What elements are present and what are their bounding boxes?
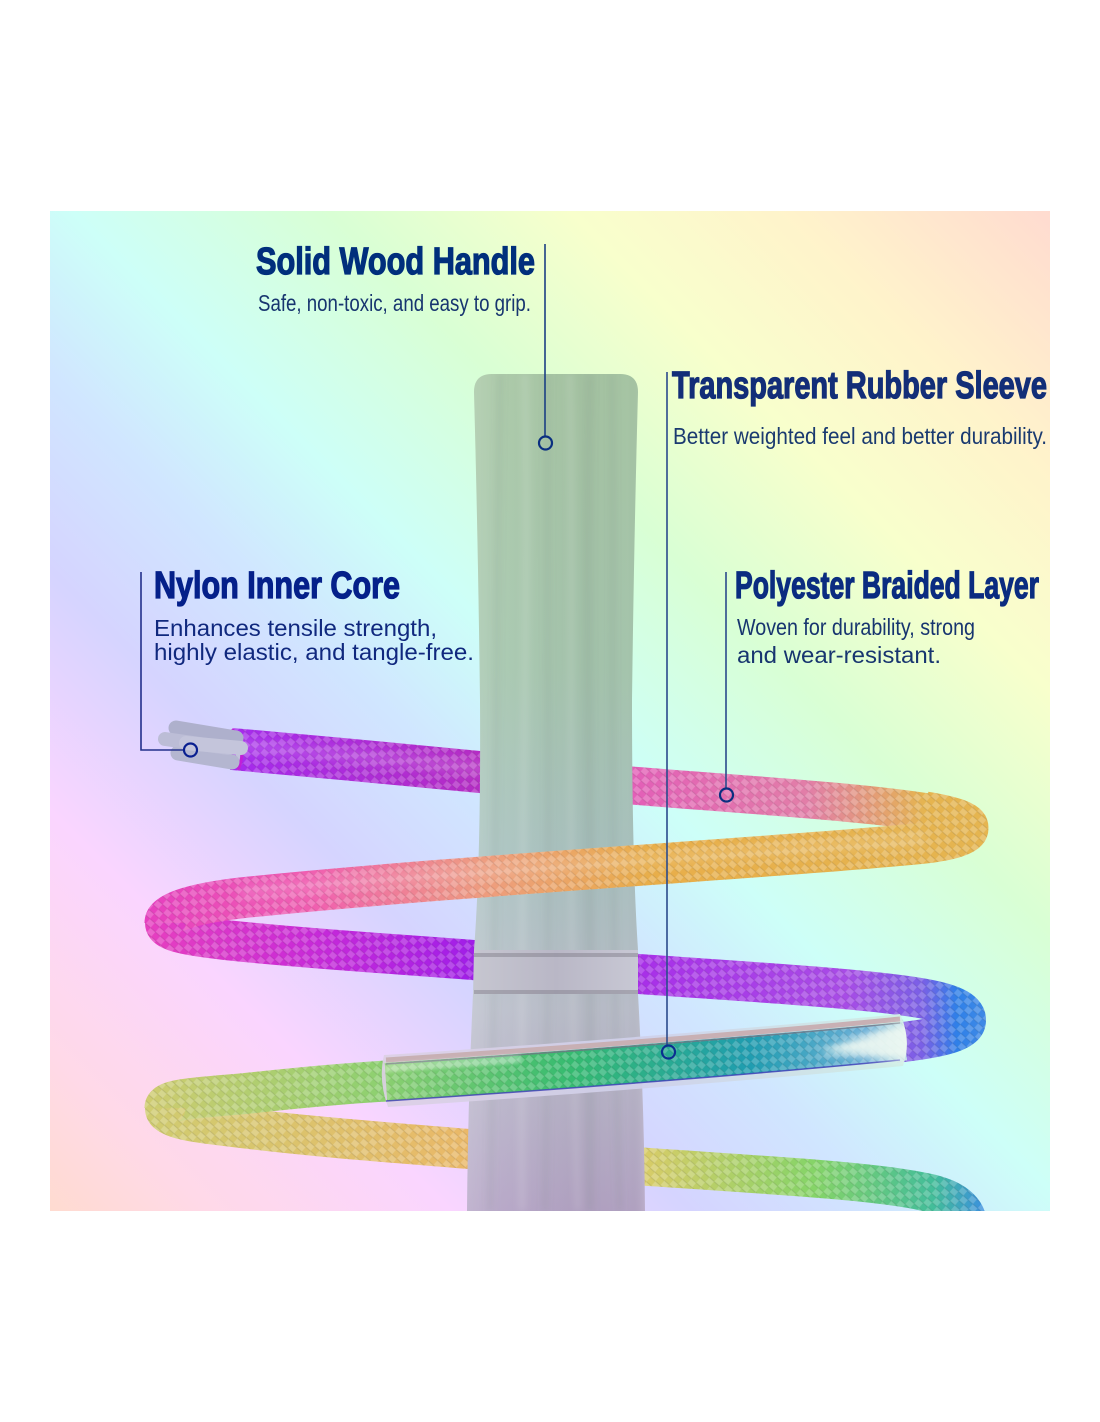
callout: nylon inner core	[141, 565, 474, 756]
strand: lower front coil	[165, 1040, 905, 1108]
strand: upper back left	[232, 745, 490, 773]
callout: solid wood handle	[256, 241, 552, 450]
strand: middle back left	[165, 923, 485, 961]
background gradient panel	[50, 211, 1050, 1211]
front cable strands	[165, 812, 968, 1108]
sleeve highlights	[386, 1019, 900, 1060]
heading: Nylon Inner Core	[154, 565, 400, 607]
body text: Safe, non-toxic, and easy to grip.	[258, 290, 531, 316]
callout: polyester braided layer: and wear-resistant.	[737, 642, 941, 668]
transparent rubber sleeve	[382, 1014, 915, 1107]
callout: nylon inner core: highly elastic, and tangle-free.	[154, 639, 474, 665]
braid inside sleeve	[386, 1041, 905, 1082]
strand: upper front coil	[165, 812, 968, 923]
sleeve end glare	[820, 1020, 915, 1062]
strand: middle back right	[625, 973, 966, 1043]
heading: Solid Wood Handle	[256, 241, 535, 283]
strand: upper back right	[625, 785, 968, 828]
sleeve body	[382, 1014, 907, 1107]
cable end cap	[232, 729, 242, 770]
body text: Better weighted feel and better durability.	[673, 423, 1047, 449]
leader line	[725, 572, 727, 788]
body text: Enhances tensile strength,	[154, 615, 437, 641]
callout: polyester braided layer	[720, 565, 1039, 802]
leader line	[141, 572, 184, 750]
cable coil	[165, 745, 968, 1226]
wood handle	[460, 374, 650, 1211]
nylon inner core strands	[165, 728, 242, 770]
strand: lower back right	[635, 1166, 968, 1226]
leader line	[544, 244, 546, 436]
wood grain	[490, 374, 620, 1211]
callout: transparent rubber sleeve	[662, 365, 1047, 1058]
handle collar	[474, 950, 638, 994]
leader line	[666, 372, 668, 1045]
strand: lower back left	[165, 1108, 480, 1150]
body text: Woven for durability, strong	[737, 614, 975, 640]
